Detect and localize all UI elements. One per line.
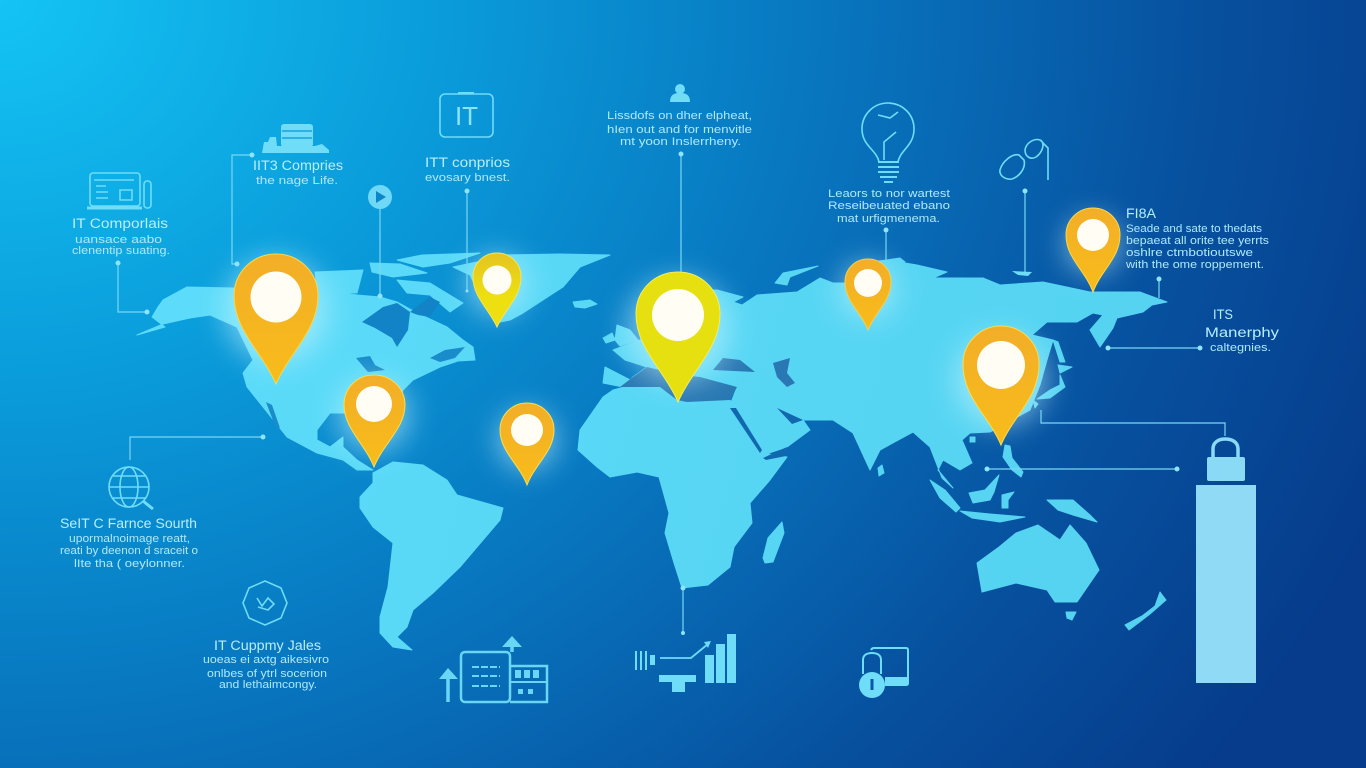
islands: Madagascar and New Zealand — [763, 522, 1166, 630]
text block: FI8A: bepaeat all orite tee yerrts — [1126, 235, 1270, 247]
pin: Far East — [1066, 208, 1120, 292]
text block: IT Cuppmy Jales: uoeas ei axtg aikesivro — [203, 654, 329, 666]
text block: SeIT C Farnce Sourth: upormalnoimage reatt, — [69, 533, 190, 545]
icon: IT box — [440, 93, 493, 137]
pin: Russia — [845, 259, 891, 330]
islands: Japan, Sakhalin, Hainan, Philippines — [970, 340, 1072, 477]
connector lines — [118, 154, 1225, 633]
text block: ITS Manerphy: caltegnies. — [1210, 342, 1271, 354]
text block: Leaors to nor wartest: Leaors to nor wartest — [828, 188, 950, 200]
text block: IT Comporlais: uansace aabo — [75, 234, 162, 246]
text block: IT Comporlais: clenentip suating. — [72, 245, 170, 257]
continent: Greenland — [453, 254, 610, 322]
text block: IT Cuppmy Jales — [203, 638, 329, 691]
text block: IT Comporlais — [72, 216, 170, 257]
text block: FI8A: oshlre ctmbotioutswe — [1126, 247, 1253, 259]
text block: FI8A — [1125, 206, 1270, 271]
text block: IT Cuppmy Jales: IT Cuppmy Jales — [214, 638, 321, 653]
pin: Europe large — [636, 272, 720, 402]
icon: play button — [368, 185, 392, 209]
text block: SeIT C Farnce Sourth: lIte tha ( oeylonner. — [74, 558, 185, 570]
pin: Greenland — [473, 253, 521, 327]
icon: globe search — [109, 467, 153, 509]
pin: Caribbean — [344, 375, 405, 467]
text block: ITS Manerphy: Manerphy — [1205, 325, 1279, 340]
continent: Australia — [977, 525, 1099, 620]
pin: East Asia — [963, 326, 1039, 445]
text block: IT Cuppmy Jales: onlbes of ytrl socerion — [207, 668, 327, 680]
icon: factory growth — [439, 636, 547, 702]
continent: Arctic islands — [315, 253, 480, 312]
pin glow — [224, 217, 1121, 470]
icon: lock and tablet — [859, 648, 908, 698]
text block: Lissdofs on dher elpheat: Lissdofs on dher elpheat, — [607, 110, 752, 122]
connector dots — [116, 152, 1202, 635]
inland waters — [266, 297, 803, 460]
text block: ITS Manerphy — [1205, 307, 1279, 354]
text block: IIT3 Compries: IIT3 Compries — [253, 158, 343, 173]
text block: ITT conprios: evosary bnest. — [425, 172, 510, 184]
text block: ITT conprios: ITT conprios — [425, 155, 510, 170]
text block: Leaors to nor wartest — [828, 188, 950, 225]
text block: Lissdofs on dher elpheat: hIen out and for menvitle — [607, 124, 752, 136]
icon: light bulb — [862, 103, 914, 182]
continent: Africa — [578, 383, 787, 588]
icon: IT box: IT — [455, 101, 478, 131]
text block: Lissdofs on dher elpheat — [607, 110, 752, 148]
icon: padlock — [1207, 439, 1245, 481]
islands: Indonesia, Sri Lanka, Papua — [878, 465, 1097, 522]
continent: Eurasia — [603, 260, 1167, 488]
islands: Iceland, Britain, Ireland — [573, 300, 638, 346]
text block: IT Cuppmy Jales: and lethaimcongy. — [219, 679, 317, 691]
text block: ITT conprios — [425, 155, 510, 184]
icon: server stack — [262, 124, 329, 153]
text block: SeIT C Farnce Sourth: reati by deenon d sraceit o — [60, 545, 198, 557]
text block: SeIT C Farnce Sourth: SeIT C Farnce Sourth — [60, 516, 197, 531]
text block: SeIT C Farnce Sourth — [60, 516, 198, 570]
world map — [137, 253, 1167, 650]
icon: laptop — [87, 173, 151, 208]
text block: Lissdofs on dher elpheat: mt yoon Inslerrheny. — [620, 136, 741, 148]
marker: line base — [1012, 271, 1032, 276]
text block: IIT3 Compries — [253, 158, 343, 187]
icon: growth chart — [635, 634, 736, 692]
icon: octagon badge — [243, 581, 287, 625]
text block: FI8A: FI8A — [1126, 206, 1156, 221]
panel: light blue bar — [1196, 485, 1256, 683]
text block: Leaors to nor wartest: mat urfigmenema. — [837, 213, 940, 225]
continent: North America — [137, 287, 475, 470]
pin: North America large — [234, 254, 318, 384]
icon: person — [670, 84, 690, 102]
text block: IIT3 Compries: the nage Life. — [256, 175, 338, 187]
icon: linked knot — [1000, 140, 1048, 180]
islands: Novaya Zemlya — [775, 258, 905, 285]
text block: FI8A: Seade and sate to thedats — [1126, 223, 1263, 235]
text block: IT Comporlais: IT Comporlais — [72, 216, 168, 231]
text block: Leaors to nor wartest: Reseibeuated ebano — [828, 200, 950, 212]
continent: South America — [360, 462, 503, 650]
text block: ITS Manerphy: ITS — [1213, 307, 1233, 322]
pin: Atlantic — [500, 403, 554, 485]
text block: FI8A: with the ome roppement. — [1125, 259, 1264, 271]
